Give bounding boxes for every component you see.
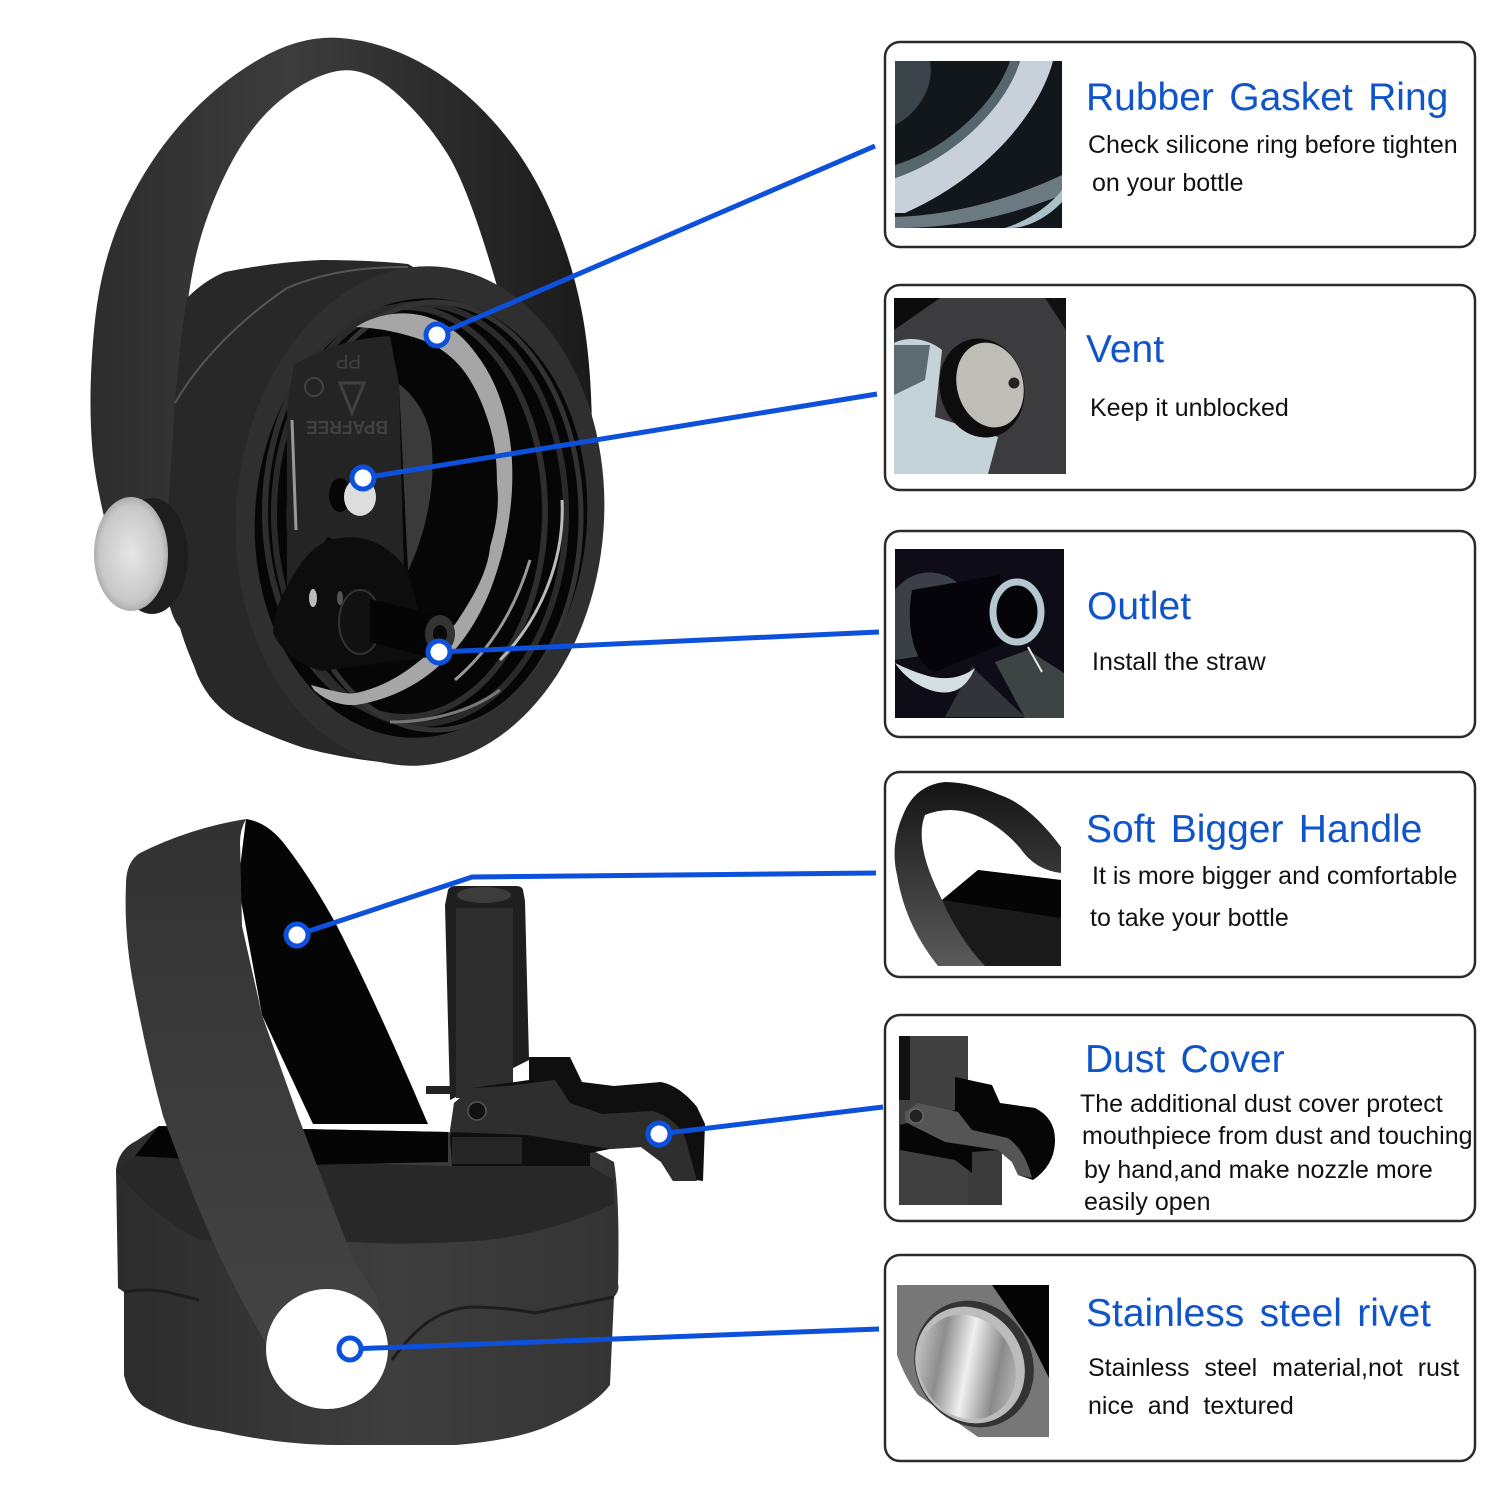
plate markings: BPAFREE xyxy=(306,417,388,438)
screw threads xyxy=(265,302,581,730)
heading: Outlet xyxy=(1087,585,1191,628)
black opening xyxy=(135,1126,448,1165)
description: Keep it unblocked xyxy=(1090,394,1289,422)
panel: stainless steel rivet xyxy=(885,1255,1475,1461)
description: by hand,and make nozzle more xyxy=(1084,1156,1433,1184)
description: easily open xyxy=(1084,1188,1210,1216)
panel: vent xyxy=(885,285,1475,490)
callout line: dust cover xyxy=(648,1107,883,1145)
gasket ring xyxy=(311,313,512,705)
heading: Vent xyxy=(1086,328,1164,371)
straw spout xyxy=(426,886,529,1100)
panel: rubber gasket ring xyxy=(885,42,1475,247)
callout line: handle xyxy=(286,873,876,946)
description: Stainless steel material,not rust xyxy=(1088,1354,1459,1382)
heading: Soft Bigger Handle xyxy=(1086,808,1422,851)
thumbnail: gasket xyxy=(895,61,1062,228)
steel rivet xyxy=(94,497,188,614)
top cap product photo xyxy=(90,38,621,778)
white rivet xyxy=(266,1289,388,1409)
description: The additional dust cover protect xyxy=(1080,1090,1443,1118)
cap opening xyxy=(240,287,602,749)
description: Install the straw xyxy=(1092,648,1267,676)
thumbnail: vent xyxy=(894,298,1066,474)
outlet dome and straw xyxy=(273,537,455,671)
handle loop xyxy=(90,38,592,604)
panel: dust cover xyxy=(885,1015,1475,1221)
body ridge highlight xyxy=(175,267,408,403)
top cap product photo: PP xyxy=(336,350,361,371)
handle band xyxy=(126,819,385,1343)
thumbnail: outlet xyxy=(895,549,1064,718)
cap body xyxy=(165,260,470,764)
callout line: outlet xyxy=(428,632,879,663)
callout line: rivet xyxy=(339,1329,879,1360)
description: on your bottle xyxy=(1092,169,1244,197)
description: Check silicone ring before tighten xyxy=(1088,131,1458,159)
thumbnail: handle xyxy=(895,782,1061,966)
description: nice and textured xyxy=(1088,1392,1294,1420)
heading: Dust Cover xyxy=(1085,1038,1285,1081)
heading: Stainless steel rivet xyxy=(1086,1292,1431,1335)
description: mouthpiece from dust and touching xyxy=(1082,1122,1473,1150)
top surface shading xyxy=(116,1156,614,1244)
vent nub xyxy=(329,478,376,516)
lever xyxy=(450,1057,705,1181)
cap rim xyxy=(219,254,621,778)
cap body xyxy=(116,1126,618,1445)
description: to take your bottle xyxy=(1090,904,1289,932)
thumbnail: rivet xyxy=(891,1279,1057,1449)
thumbnail: dust cover xyxy=(899,1036,1055,1205)
panel: soft bigger handle xyxy=(885,772,1475,977)
body ridge xyxy=(124,1290,614,1360)
callout line: gasket ring xyxy=(426,146,875,346)
heading: Rubber Gasket Ring xyxy=(1086,76,1448,119)
back of handle xyxy=(238,819,428,1124)
callout line: vent xyxy=(352,394,877,489)
bottom cap product photo xyxy=(116,819,705,1445)
back plate xyxy=(287,336,404,590)
description: It is more bigger and comfortable xyxy=(1092,862,1457,890)
panel: outlet xyxy=(885,531,1475,737)
